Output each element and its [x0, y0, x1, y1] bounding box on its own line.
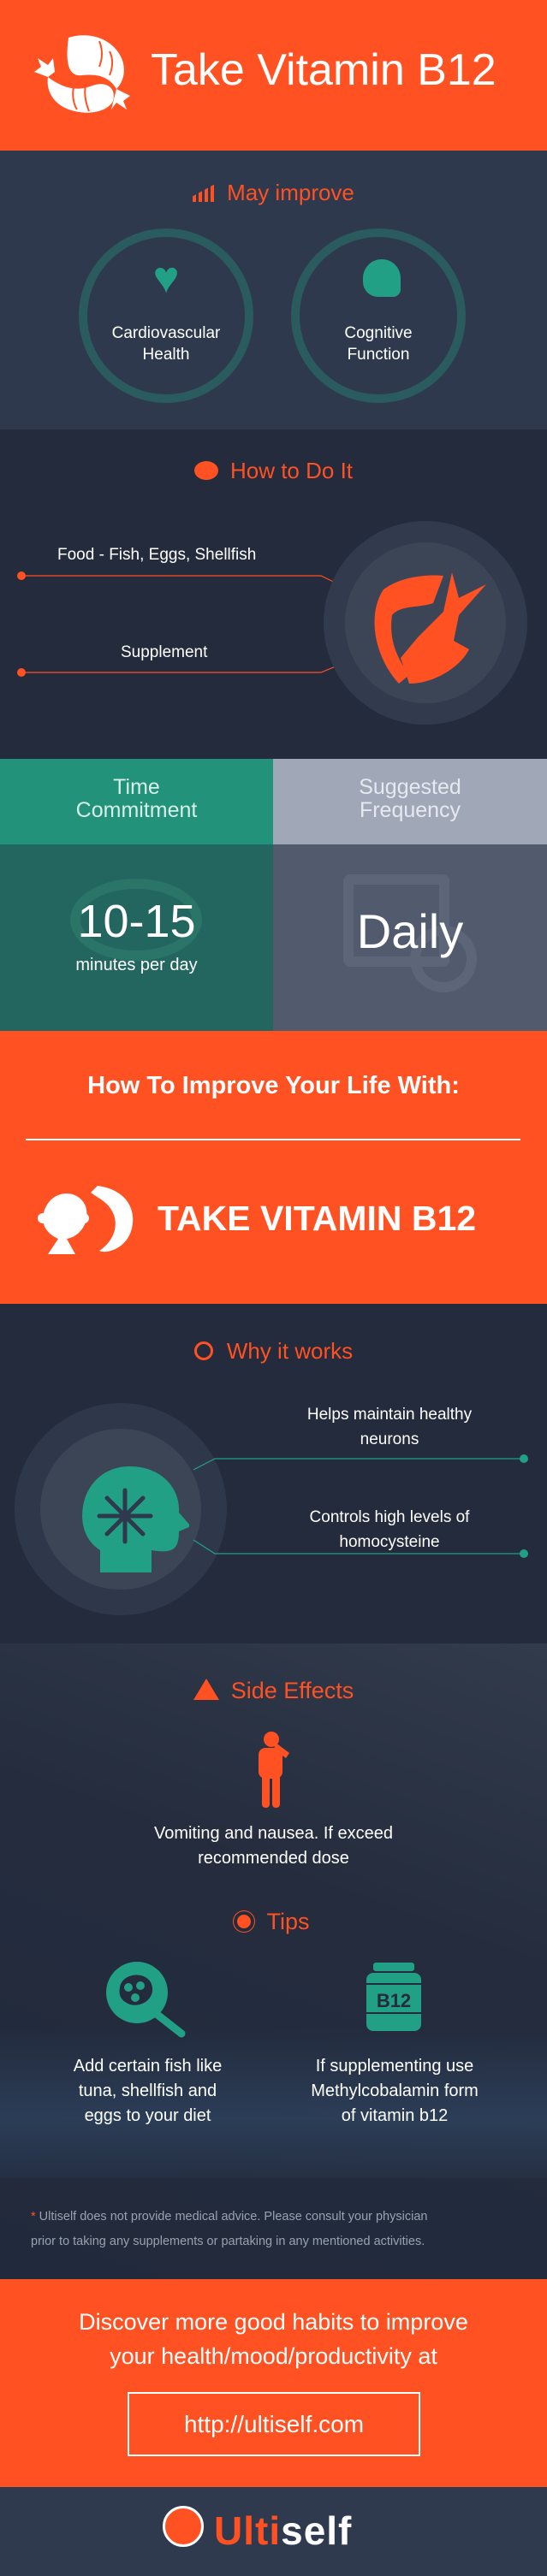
text: vomiting: Vomiting and nausea. If exceed: [154, 1824, 393, 1843]
text: homocysteine: homocysteine: [339, 1533, 440, 1551]
circle: cardiovascular: [79, 228, 253, 403]
url box: [128, 2392, 420, 2456]
icon: brain head: [163, 2506, 204, 2547]
text: cognitive: Function: [348, 346, 409, 364]
icon: calendar faded: [343, 874, 449, 967]
panel: time commitment: Time: [113, 775, 160, 799]
icon: sick person: [259, 1732, 289, 1808]
text: neurons: neurons: [360, 1430, 419, 1448]
banner: how to improve: How To Improve Your Life With:: [87, 1072, 460, 1099]
panel: why it works: [0, 1304, 547, 1643]
text: homocysteine: [310, 1508, 469, 1551]
panel: time commitment: [0, 759, 273, 1031]
icon: frying pan: [106, 1962, 185, 2038]
footer logo: [0, 2487, 547, 2576]
text: food: Food - Fish, Eggs, Shellfish: [57, 546, 256, 564]
panel: time commitment: Commitment: [76, 798, 197, 822]
logo text: Ultiself: [214, 2508, 352, 2553]
heading: why: Why it works: [227, 1338, 353, 1364]
footer cta: Discover more good habits to improve: [79, 2309, 468, 2335]
text: neurons: [307, 1406, 473, 1448]
panel: side effects and tips: [0, 1643, 547, 2279]
text: cardiovascular: [112, 324, 221, 364]
title: Take Vitamin B12: [151, 45, 496, 95]
icon: head: [363, 259, 401, 297]
icon: seafood circle: [324, 521, 527, 725]
circle: cognitive: [291, 228, 466, 403]
heading: may improve: May improve: [227, 180, 354, 205]
heading: tips: Tips: [266, 1909, 310, 1934]
text: cardiovascular: Health: [143, 346, 189, 364]
panel: how to do it: [0, 429, 547, 759]
text: cognitive: Cognitive: [344, 324, 413, 342]
heading: side effects: Side Effects: [231, 1678, 354, 1703]
icon: fish and shrimp: [38, 1186, 134, 1254]
text: 10-15: 10-15: [77, 896, 196, 947]
panel: frequency: Frequency: [360, 798, 461, 822]
text: vomiting: [154, 1824, 393, 1868]
panel: time commitment: minutes per day: [75, 956, 198, 974]
icon: b12 bottle: B12: [377, 1990, 411, 2011]
text: tip supplement: [311, 2057, 479, 2125]
icon: heart: ♥: [153, 253, 179, 303]
icon: head circle: [15, 1403, 227, 1615]
icon: shrimp: [34, 35, 130, 113]
text: tip fish: Add certain fish like: [74, 2057, 222, 2076]
line: food: [17, 571, 334, 677]
icon: clock faded: [70, 879, 202, 961]
text: tip supplement: If supplementing use: [316, 2057, 473, 2076]
text: take vitamin b12: TAKE VITAMIN B12: [158, 1199, 476, 1238]
text: tip supplement: of vitamin b12: [342, 2106, 448, 2125]
icon: b12 bottle: [366, 1963, 421, 2031]
text: cardiovascular: Cardiovascular: [112, 324, 220, 342]
heading: how to: How to Do It: [230, 458, 353, 483]
url box: http://ultiself.com: [184, 2411, 364, 2437]
text: homocysteine: Controls high levels of: [310, 1508, 469, 1526]
text: cognitive: [344, 324, 413, 364]
text: tip fish: eggs to your diet: [85, 2106, 211, 2125]
text: neurons: Helps maintain healthy: [307, 1406, 472, 1424]
heading: tips: [233, 1909, 310, 1934]
footer cta: your health/mood/productivity at: [110, 2343, 437, 2369]
footer cta: [0, 2279, 547, 2487]
text: supplement: Supplement: [121, 643, 207, 661]
text: daily: Daily: [357, 904, 463, 958]
header: [0, 0, 547, 151]
panel: frequency: Suggested: [359, 775, 461, 799]
panel: may improve: [0, 151, 547, 429]
text: vomiting: recommended dose: [198, 1849, 349, 1868]
panel: frequency: [273, 759, 547, 1031]
disclaimer: [31, 2210, 427, 2248]
text: tip fish: [74, 2057, 222, 2125]
text: tip supplement: Methylcobalamin form: [311, 2082, 479, 2100]
banner: how to improve: [0, 1031, 547, 1304]
disclaimer: prior to taking any supplements or partaking in any mentioned activities.: [31, 2235, 425, 2248]
disclaimer: * Ultiself does not provide medical advice. Please consult your physician: [31, 2210, 427, 2224]
text: tip fish: tuna, shellfish and: [79, 2082, 217, 2100]
